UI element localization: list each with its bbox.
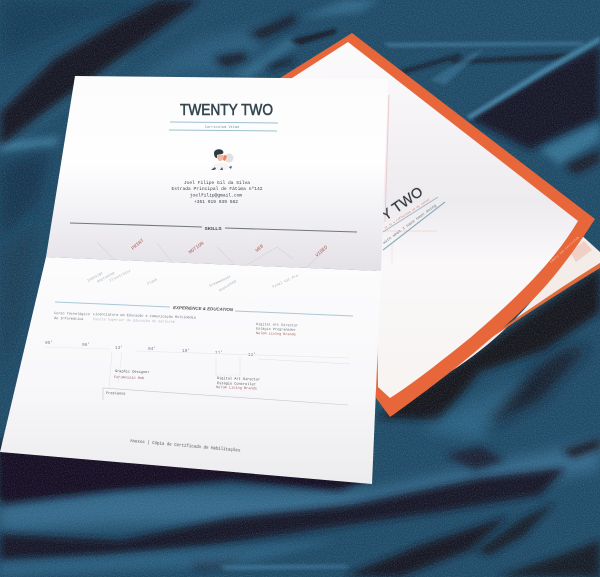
skill tools: Illustrator <box>109 269 132 284</box>
education entries <box>54 311 196 325</box>
faint cover guide lines <box>383 95 437 263</box>
skill tools: Final Cut Pro <box>272 273 299 290</box>
timeline: 11' <box>215 350 223 356</box>
timeline role: art director: Estágio Controller <box>217 381 256 387</box>
upper half of sheet <box>46 76 388 271</box>
shadow below cover <box>378 268 600 420</box>
skill labels <box>130 238 329 258</box>
skill labels: WEB <box>254 243 265 254</box>
shadow under sheet <box>0 440 372 504</box>
timeline role: graphic designer: Graphic Designer <box>115 369 150 375</box>
dark fold upper left <box>0 0 200 146</box>
skill tools: InDesign <box>86 271 104 284</box>
title: TWENTY TWO <box>180 102 273 119</box>
timeline <box>44 340 350 405</box>
lower half of sheet <box>0 257 381 484</box>
timeline role: graphic designer <box>114 369 150 381</box>
experience and education heading: EXPERIENCE & EDUCATION <box>173 305 234 312</box>
skill tools: Photoshop <box>218 279 237 294</box>
back page under orange cover <box>392 232 600 416</box>
current role: Estágio Programador <box>256 327 296 333</box>
lower fabric folds <box>0 440 600 530</box>
title rules and subtitle <box>169 122 278 131</box>
title rules and subtitle: Curriculum Vitae <box>205 125 239 130</box>
cover side text: twenty two curriculum <box>549 235 580 264</box>
cover rules and caption: with what I have been doing <box>382 203 438 246</box>
contact details: joelfilip@gmail.com <box>190 192 242 198</box>
education entries: Curso Tecnológico <box>54 311 90 317</box>
timeline: 05' <box>45 340 53 346</box>
timeline: 13' <box>115 345 123 351</box>
timeline role: graphic designer: Forumvisio Hub <box>114 375 144 381</box>
timeline role: art director: Digital Art Director <box>217 376 260 383</box>
skill tools <box>86 269 299 294</box>
experience and education heading <box>55 302 353 316</box>
timeline: 06' <box>82 342 90 348</box>
contact details: Estrada Principal de Fátima nº142 <box>172 186 263 192</box>
cover white face <box>292 42 578 398</box>
timeline: 10' <box>182 348 190 354</box>
contact details: Joel Filipe Gil da Silva <box>184 180 250 186</box>
skill tools: Flash <box>147 277 159 287</box>
education entries: de Informática <box>54 316 83 322</box>
cover rules and caption: it is a reflection on my career <box>383 197 431 230</box>
skill labels: PRINT <box>130 238 145 252</box>
cover rules and caption <box>382 197 445 250</box>
contact details <box>172 180 263 205</box>
dark folds top centre <box>213 14 297 70</box>
contact details: +351 919 939 582 <box>194 199 238 205</box>
education entries: Escola Superior de Educação de Santarém <box>93 317 175 325</box>
timeline role: art director <box>216 376 260 391</box>
timeline role: freelance: Freelance <box>106 391 126 397</box>
timeline role: art director: Nelom Living Brands <box>216 385 257 391</box>
timeline: 12' <box>248 352 256 358</box>
skills heading <box>70 223 357 232</box>
icon: portrait illustration <box>211 149 234 170</box>
current role: Nelom Living Brands <box>256 331 296 337</box>
orange cover sheet <box>280 33 595 417</box>
skills heading: SKILLS <box>204 226 222 232</box>
dark fold upper right <box>468 45 600 150</box>
current role: Digital Art Director <box>256 322 298 328</box>
folded resume sheet <box>0 76 388 484</box>
skill labels: VIDEO <box>314 244 329 258</box>
skill tools: Photoshop <box>96 271 116 285</box>
timeline: 04' <box>148 346 156 352</box>
timeline role: freelance <box>103 388 348 405</box>
education entries: Licenciatura em Educação e Comunicação Multimédia <box>93 312 196 321</box>
skill labels: MOTION <box>188 241 205 256</box>
cover title: Y TWO <box>379 184 426 224</box>
skill tools: Dreamweaver <box>209 274 232 289</box>
footer note: Anexos | Cópia de Certificado de Habilitações <box>130 439 241 454</box>
current role <box>256 322 298 337</box>
skills zigzag <box>97 242 327 267</box>
